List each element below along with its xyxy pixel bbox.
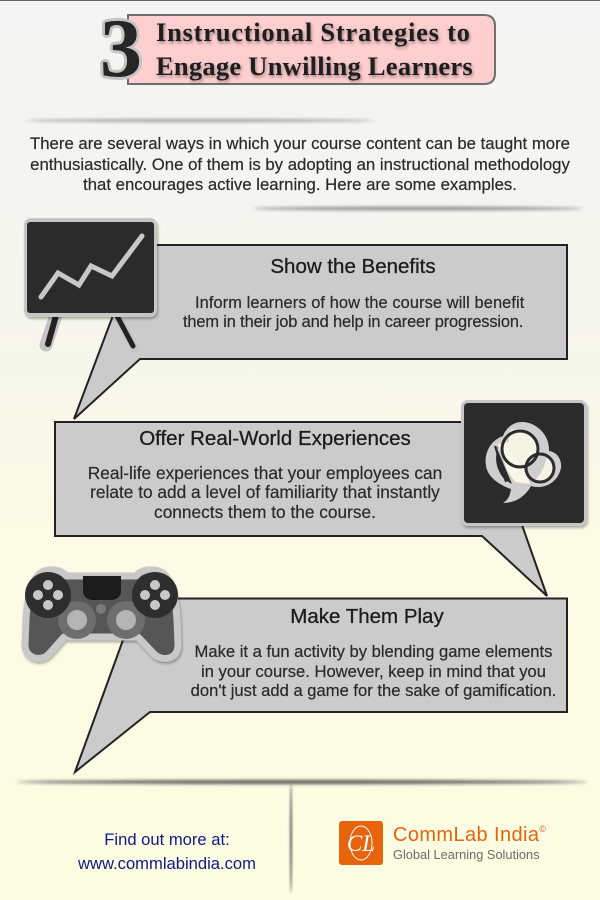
icon: overlapping speech bubbles [461, 400, 587, 526]
callout text: real-world experiences: connects them to the course. [154, 502, 376, 522]
callout text: real-world experiences [88, 462, 442, 522]
footer link text: Find out more at: [104, 830, 230, 849]
icon: game controller [25, 570, 178, 658]
callout: real-world experiences shape [55, 422, 547, 596]
intro text: There are several ways in which your course content can be taught more [30, 134, 570, 153]
callout text: make them play: Make it a fun activity by blending game elements [195, 642, 552, 661]
callout heading: make them play: Make Them Play [290, 605, 444, 628]
footer link text: www.commlabindia.com [78, 854, 256, 873]
footer link text [78, 830, 256, 873]
title text: Instructional Strategies to [156, 17, 471, 47]
intro text: that encourages active learning. Here are some examples. [83, 175, 517, 194]
callout text: show the benefits [183, 294, 524, 331]
callout heading: show the benefits: Show the Benefits [270, 255, 436, 278]
title text [156, 17, 475, 84]
callout heading: real-world experiences: Offer Real-World Experiences [139, 427, 411, 450]
callout: make them play shape [75, 598, 567, 772]
title text: Engage Unwilling Learners [156, 50, 473, 80]
callout text: real-world experiences: relate to add a level of familiarity that instantly [90, 482, 440, 502]
logo tagline: Global Learning Solutions [393, 847, 540, 862]
callout text: make them play [191, 642, 556, 700]
callout text: make them play: don't just add a game for the sake of gamification. [191, 681, 556, 700]
callout: show the benefits shape [74, 245, 567, 419]
logo mark: CL [347, 831, 375, 856]
title banner [128, 15, 495, 84]
intro text [30, 134, 570, 194]
icon: presentation board [24, 218, 157, 347]
callout text: show the benefits: them in their job and help in career progression. [183, 313, 523, 331]
callout text: show the benefits: Inform learners of how the course will benefit [195, 294, 524, 312]
logo name: CommLab India© [393, 824, 546, 846]
intro text: enthusiastically. One of them is by adopting an instructional methodology [30, 154, 570, 174]
title numeral: 3 [100, 2, 142, 95]
logo mark [339, 821, 383, 865]
callout text: make them play: in your course. However, keep in mind that you [201, 662, 546, 680]
callout text: real-world experiences: Real-life experiences that your employees can [88, 462, 442, 482]
